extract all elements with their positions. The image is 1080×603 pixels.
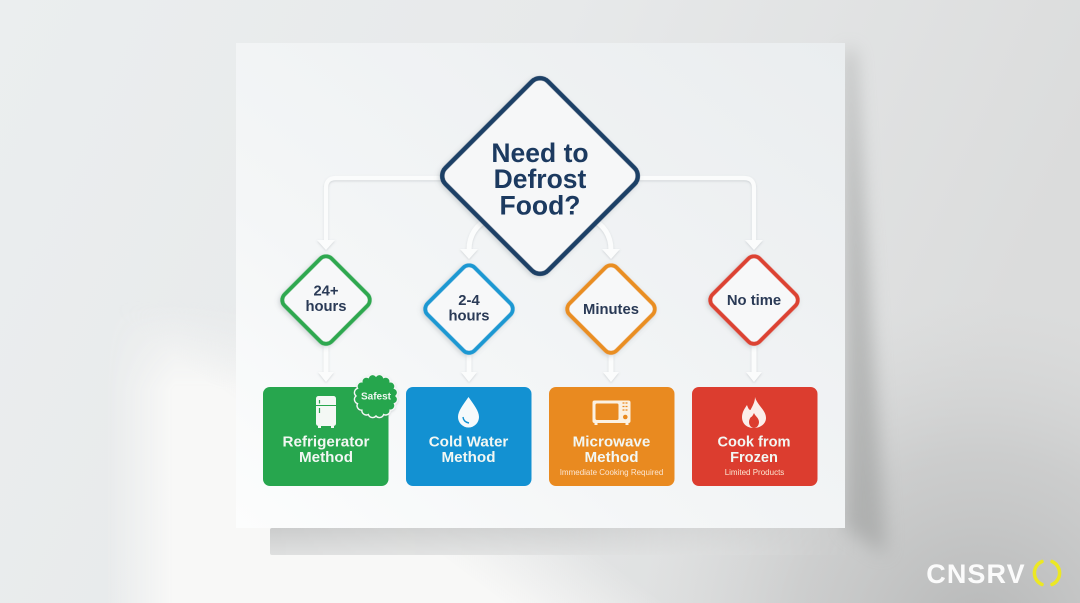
label: cold water method: Method bbox=[442, 449, 496, 466]
title: Need to bbox=[491, 138, 589, 168]
arrow: to 2-4 hours bbox=[460, 218, 490, 259]
label: microwave method: Microwave bbox=[573, 434, 650, 450]
title: Food? bbox=[500, 190, 580, 220]
decision: no time bbox=[707, 253, 801, 347]
badge: safest: Safest bbox=[361, 392, 392, 402]
panel shadow on wall bbox=[270, 50, 885, 555]
decision: 24+ hours: 24+ bbox=[313, 284, 339, 300]
logo: CNSRV: CNSRV bbox=[926, 559, 1026, 589]
label: refrigerator method: Refrigerator bbox=[283, 434, 370, 450]
card: refrigerator method bbox=[263, 387, 388, 486]
arrow: to Minutes bbox=[590, 218, 620, 259]
badge: safest bbox=[354, 374, 398, 418]
arrow: to 24+ hours bbox=[317, 178, 445, 250]
label: cold water method: Cold Water bbox=[429, 434, 508, 450]
arrow: minutes to microwave bbox=[603, 355, 619, 382]
card: microwave method bbox=[549, 387, 674, 486]
icon: logo ring bbox=[1034, 562, 1060, 584]
icon: water drop bbox=[458, 397, 479, 428]
decision: 24+ hours: hours bbox=[305, 299, 347, 315]
decision: 2-4 hours: hours bbox=[448, 308, 490, 324]
decision: 2-4 hours bbox=[422, 262, 516, 356]
note: immediate cooking required: Immediate Cooking Required bbox=[560, 468, 663, 477]
label: cook from frozen: Frozen bbox=[730, 450, 778, 466]
connector arrows from the main question bbox=[317, 178, 763, 382]
arrow: 24+ hours to refrigerator bbox=[318, 346, 334, 382]
decision: 24+ hours bbox=[279, 253, 373, 347]
note: limited products: Limited Products bbox=[725, 468, 784, 477]
arrow: no time to cook from frozen bbox=[746, 346, 762, 382]
arrow: 2-4 hours to cold water bbox=[461, 355, 477, 382]
card: cold water method bbox=[406, 387, 532, 486]
card: cook from frozen bbox=[692, 387, 818, 486]
icon: refrigerator bbox=[316, 396, 336, 428]
label: refrigerator method: Method bbox=[299, 449, 353, 466]
panel: flowchart board bbox=[236, 43, 845, 528]
decision: no time: No time bbox=[727, 293, 781, 309]
decision: minutes bbox=[564, 262, 658, 356]
label: microwave method: Method bbox=[584, 449, 638, 466]
icon: flame bbox=[742, 397, 766, 428]
label: cook from frozen: Cook from bbox=[718, 434, 791, 450]
title: Defrost bbox=[494, 164, 587, 194]
icon: microwave bbox=[592, 400, 630, 425]
main decision diamond bbox=[437, 73, 643, 279]
arrow: to No time bbox=[636, 178, 763, 250]
decision: minutes: Minutes bbox=[583, 302, 639, 318]
decision: 2-4 hours: 2-4 bbox=[458, 293, 480, 309]
